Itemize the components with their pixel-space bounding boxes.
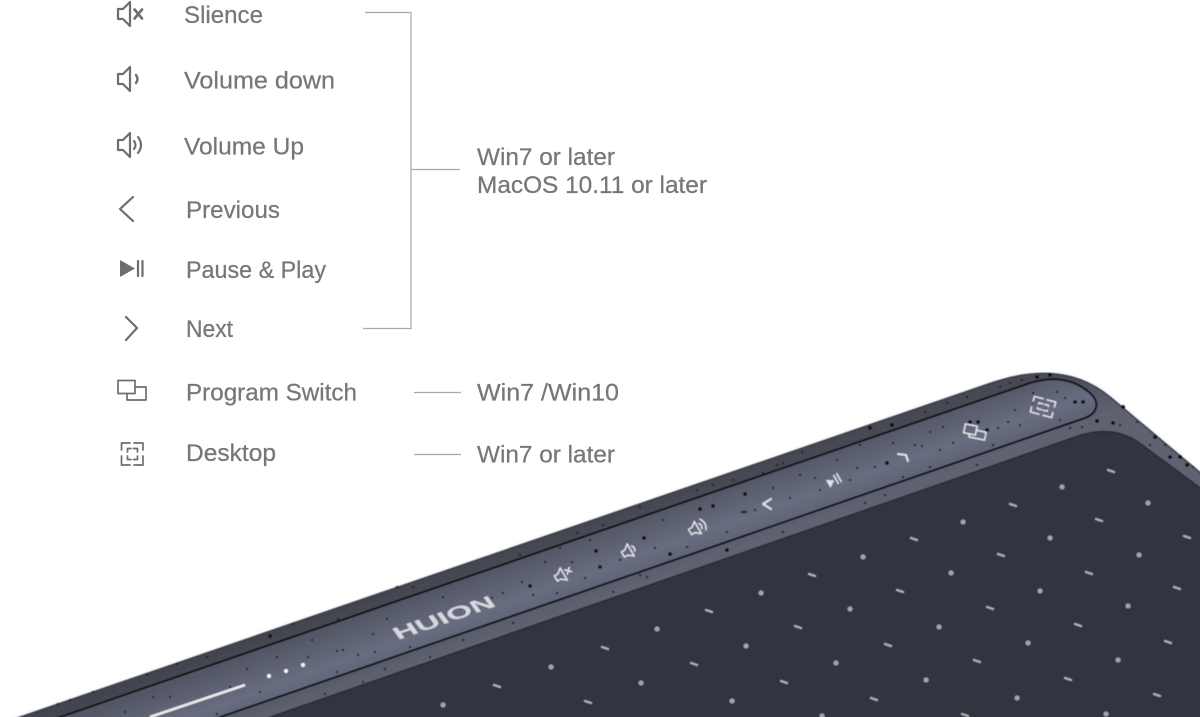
compatibility note: desktop: Win7 or later	[477, 442, 615, 468]
label: Program Switch: Program Switch	[186, 380, 357, 406]
key list: media and system shortcuts	[118, 2, 357, 467]
key icon: silence	[552, 564, 574, 585]
icon: volume down	[118, 67, 138, 91]
key icon: volume down	[619, 542, 638, 561]
icon: program switch	[118, 380, 146, 400]
label: Desktop: Desktop	[186, 440, 276, 467]
logo: HUION	[388, 592, 500, 643]
label: Pause & Play: Pause & Play	[186, 257, 327, 284]
connector: desktop	[414, 454, 461, 456]
button strip	[40, 379, 1096, 717]
drawing area marks: dots	[443, 487, 1148, 716]
connector: program switch	[414, 392, 461, 394]
key icon: previous	[763, 499, 771, 509]
label: Slience: Slience	[184, 2, 263, 29]
icon: volume up	[118, 133, 141, 157]
key icon: next	[898, 454, 908, 461]
compatibility note: media keys	[477, 144, 707, 199]
speckles: large	[270, 375, 1187, 636]
tablet shadow	[0, 376, 1200, 717]
icon: pause and play	[120, 260, 142, 277]
compatibility note: media keys: MacOS 10.11 or later	[477, 172, 707, 199]
tablet illustration	[0, 373, 1200, 717]
key icon: pause and play	[826, 474, 841, 488]
icon: desktop	[122, 443, 143, 465]
drawing area marks: dashes	[494, 470, 1190, 716]
drawing area	[250, 431, 1200, 717]
tablet body	[0, 373, 1200, 717]
label: Volume down: Volume down	[184, 68, 335, 94]
compatibility note: program switch: Win7 /Win10	[477, 380, 619, 406]
icon: silence	[118, 2, 142, 26]
label: Next: Next	[186, 316, 233, 343]
key icon: volume up	[687, 517, 708, 538]
indicator bar	[150, 685, 245, 717]
key icon: program switch	[963, 424, 987, 440]
key icon: desktop	[1030, 396, 1056, 418]
label: Previous: Previous	[186, 197, 280, 224]
indicator dots	[267, 663, 305, 678]
icon: previous	[120, 197, 133, 221]
speckles: small	[58, 380, 1193, 714]
label: Volume Up: Volume Up	[184, 134, 304, 160]
bracket: media keys compatibility	[363, 12, 460, 328]
compatibility note: media keys: Win7 or later	[477, 144, 615, 171]
icon: next	[126, 317, 137, 340]
